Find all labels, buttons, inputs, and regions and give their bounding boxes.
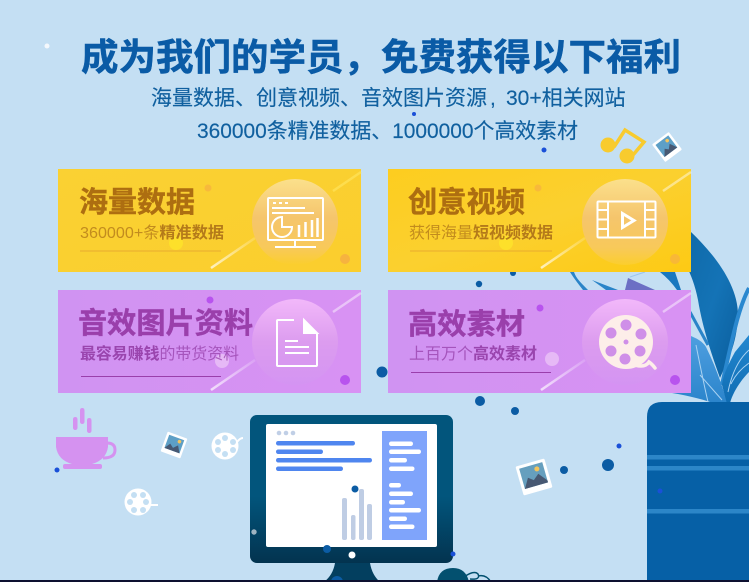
card heading: 创意视频 [408,186,525,219]
text lines [276,441,372,471]
card subtext: 360000+条精准数据 [80,223,224,242]
icon: film reel [599,315,655,369]
card heading: 海量数据 [79,186,195,219]
window dots [277,431,295,435]
subtitle line 1: 海量数据、创意视频、音效图片资源 [151,87,487,110]
subtitle line 2: 360000条精准数据、1000000个高效素材 [197,120,578,143]
icon: photo left [161,432,187,458]
bottom dark edge [0,580,749,582]
subtitle line 1: , [490,87,496,110]
mini bar chart [342,489,372,540]
icon: reel white 1 [212,432,243,460]
icon: monitor chart [268,198,323,247]
vase [647,402,749,582]
card heading: 音效图片资料 [78,307,253,340]
card: 音效图片资料 [58,290,361,393]
card subtext: 最容易赚钱的带货资料 [80,344,239,363]
icon: coffee cup [56,408,115,469]
monitor [250,415,453,582]
icon: music note [600,130,644,164]
icon: photo top right [652,132,682,162]
card heading: 高效素材 [408,308,525,341]
card: 海量数据 [58,169,361,272]
icon: photo right [515,458,553,496]
icon: film strip [598,202,656,238]
card: 创意视频 [388,169,691,272]
mouse and cable [437,568,491,582]
card subtext: 获得海量短视频数据 [409,224,553,242]
card subtext: 上百万个高效素材 [409,344,537,363]
subtitle line 1: 30+相关网站 [506,87,626,110]
scattered dots [44,44,662,494]
title: 成为我们的学员，免费获得以下福利 [81,37,681,78]
icon: document [277,320,317,366]
dots over monitor [251,486,456,582]
icon: reel white 2 [124,488,158,516]
card: 高效素材 [388,290,691,393]
plant leaves [570,232,749,404]
sidebar [382,431,427,540]
